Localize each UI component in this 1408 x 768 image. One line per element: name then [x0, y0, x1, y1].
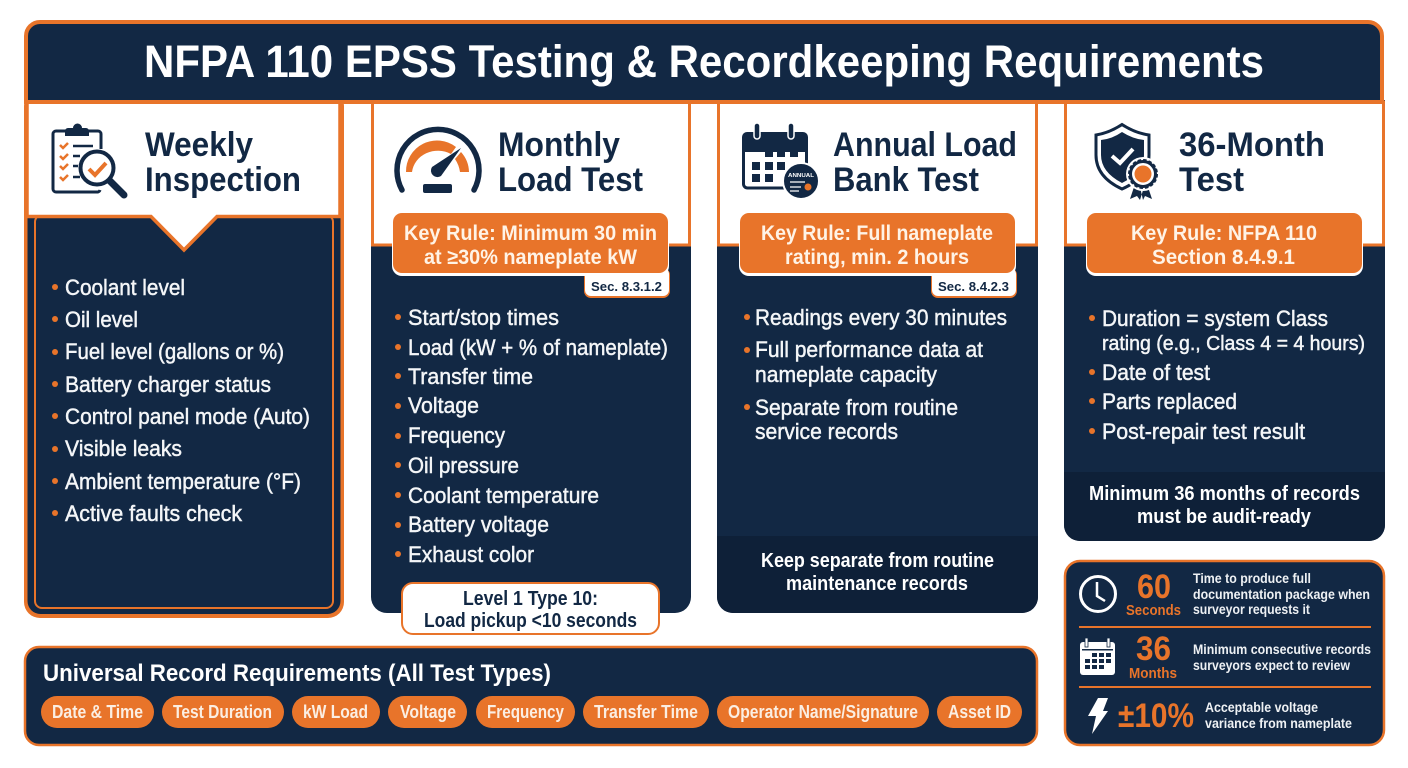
chips: required record fields: Voltage [400, 702, 456, 722]
stat: plus or minus 10 percent: ±10% [1118, 697, 1194, 735]
text: 60 seconds description: documentation package when [1193, 587, 1370, 602]
panel: monthly load test [371, 100, 691, 634]
stat: 36 months [1129, 630, 1177, 682]
checklist: monthly items: Coolant temperature [408, 483, 599, 508]
icon: calendar with annual badge [742, 123, 819, 199]
stat: 60 seconds: Seconds [1126, 602, 1181, 619]
checklist: annual items: nameplate capacity [755, 362, 937, 387]
callout: 36-month key rule: Key Rule: NFPA 110 [1131, 222, 1317, 245]
text: voltage variance description [1205, 700, 1352, 731]
callout: level 1 type 10 [402, 583, 659, 634]
panel: weekly inspection [24, 90, 344, 618]
chips: required record fields: Asset ID [948, 702, 1011, 722]
footer strip: audit-ready note: must be audit-ready [1137, 506, 1312, 528]
checklist: 36-month items: rating (e.g., Class 4 = 4 hours) [1102, 333, 1365, 355]
icon: gauge [397, 129, 479, 193]
stat: 60 seconds: 60 [1137, 568, 1171, 606]
checklist: weekly items: Oil level [65, 307, 138, 332]
heading: weekly inspection: Weekly [145, 126, 253, 164]
callout: level 1 type 10: Level 1 Type 10: [463, 588, 598, 610]
callout: 36-month key rule [1086, 213, 1363, 276]
heading: annual load bank test: Bank Test [833, 161, 979, 199]
chips: required record fields: kW Load [303, 702, 368, 722]
callout: monthly key rule: at ≥30% nameplate kW [424, 246, 637, 269]
chips: required record fields: Date & Time [52, 702, 143, 722]
checklist: monthly items: Oil pressure [408, 453, 519, 478]
panel: 36-month test [1064, 100, 1385, 541]
checklist: monthly items: Load (kW + % of nameplate) [408, 335, 668, 360]
panel: key statistics [1065, 561, 1384, 745]
chips: required record fields [41, 696, 1022, 728]
checklist: annual items [744, 305, 1007, 444]
checklist: annual items: Full performance data at [755, 337, 983, 362]
panel: annual load bank test [717, 100, 1038, 613]
checklist: monthly items: Exhaust color [408, 542, 534, 567]
footer strip: audit-ready note [1064, 472, 1385, 541]
chips: required record fields: Operator Name/Signature [728, 702, 918, 722]
checklist: weekly items: Battery charger status [65, 372, 271, 397]
section tag: 8.4.2.3 [931, 268, 1017, 298]
text: 36 months description: surveyors expect to review [1193, 658, 1350, 673]
heading: universal record requirements: Universal Record Requirements (All Test Types) [43, 660, 551, 687]
checklist: weekly items: Control panel mode (Auto) [65, 404, 310, 429]
heading: monthly load test: Monthly [498, 126, 620, 164]
checklist: 36-month items: Parts replaced [1102, 389, 1237, 414]
checklist: weekly items [52, 275, 310, 526]
checklist: 36-month items: Duration = system Class [1102, 306, 1328, 331]
heading: 36-month test [1179, 126, 1325, 199]
text: voltage variance description: Acceptable voltage [1205, 700, 1318, 715]
stat: 60 seconds [1126, 568, 1181, 619]
title banner: NFPA 110 EPSS Testing & Recordkeeping Requirements [144, 36, 1264, 87]
footer strip: annual note: maintenance records [786, 573, 968, 595]
icon: clipboard with magnifier [53, 124, 124, 195]
icon: calendar with annual badge: ANNUAL [788, 173, 815, 179]
stat: 36 months: 36 [1136, 630, 1171, 668]
checklist: weekly items: Ambient temperature (°F) [65, 469, 301, 494]
checklist: monthly items: Battery voltage [408, 512, 549, 537]
checklist: monthly items: Frequency [408, 423, 505, 448]
heading: annual load bank test: Annual Load [833, 126, 1017, 164]
text: 60 seconds description: Time to produce full [1193, 571, 1311, 586]
callout: annual key rule [739, 213, 1016, 276]
checklist: monthly items: Start/stop times [408, 305, 559, 330]
callout: level 1 type 10: Load pickup <10 seconds [424, 610, 637, 632]
checklist: weekly items: Fuel level (gallons or %) [65, 339, 284, 364]
checklist: annual items: Readings every 30 minutes [755, 305, 1007, 330]
section tag: 8.4.2.3: Sec. 8.4.2.3 [938, 279, 1009, 294]
icon: clock [1080, 576, 1116, 612]
heading: 36-month test: Test [1179, 161, 1244, 199]
checklist: monthly items [395, 305, 668, 567]
icon: lightning bolt [1088, 698, 1108, 734]
icon: shield with rosette [1096, 124, 1160, 200]
panel: universal record requirements [25, 647, 1037, 745]
heading: monthly load test: Load Test [498, 161, 643, 199]
icon: calendar [1080, 638, 1115, 675]
callout: annual key rule: rating, min. 2 hours [785, 246, 969, 269]
section tag: 8.3.1.2: Sec. 8.3.1.2 [591, 279, 662, 294]
text: 60 seconds description: surveyor requests it [1193, 602, 1310, 617]
title banner [26, 22, 1382, 102]
text: 60 seconds description [1193, 571, 1370, 617]
text: 36 months description: Minimum consecutive records [1193, 642, 1371, 657]
checklist: monthly items: Voltage [408, 393, 479, 418]
checklist: 36-month items: Post-repair test result [1102, 419, 1305, 444]
heading: annual load bank test [833, 126, 1017, 199]
checklist: weekly items: Visible leaks [65, 436, 182, 461]
checklist: weekly items: Active faults check [65, 501, 243, 526]
checklist: annual items: Separate from routine [755, 395, 958, 420]
callout: 36-month key rule: Section 8.4.9.1 [1152, 246, 1295, 269]
checklist: monthly items: Transfer time [408, 364, 533, 389]
callout: monthly key rule [392, 213, 669, 276]
text: 36 months description [1193, 642, 1371, 673]
heading: monthly load test [498, 126, 643, 199]
text: voltage variance description: variance from nameplate [1205, 716, 1352, 731]
footer strip: annual note: Keep separate from routine [761, 550, 994, 572]
checklist: weekly items: Coolant level [65, 275, 185, 300]
checklist: annual items: service records [755, 419, 898, 444]
chips: required record fields: Transfer Time [594, 702, 698, 722]
chips: required record fields: Frequency [487, 702, 564, 722]
footer strip: annual note [717, 536, 1038, 613]
heading: weekly inspection [145, 126, 301, 199]
callout: annual key rule: Key Rule: Full nameplate [761, 222, 993, 245]
checklist: 36-month items: Date of test [1102, 360, 1210, 385]
section tag: 8.3.1.2 [584, 268, 670, 298]
stat: 36 months: Months [1129, 665, 1177, 682]
heading: 36-month test: 36-Month [1179, 126, 1325, 164]
callout: monthly key rule: Key Rule: Minimum 30 min [404, 222, 657, 245]
heading: weekly inspection: Inspection [145, 161, 301, 199]
chips: required record fields: Test Duration [173, 702, 272, 722]
footer strip: audit-ready note: Minimum 36 months of records [1089, 483, 1360, 505]
checklist: 36-month items [1089, 306, 1365, 444]
